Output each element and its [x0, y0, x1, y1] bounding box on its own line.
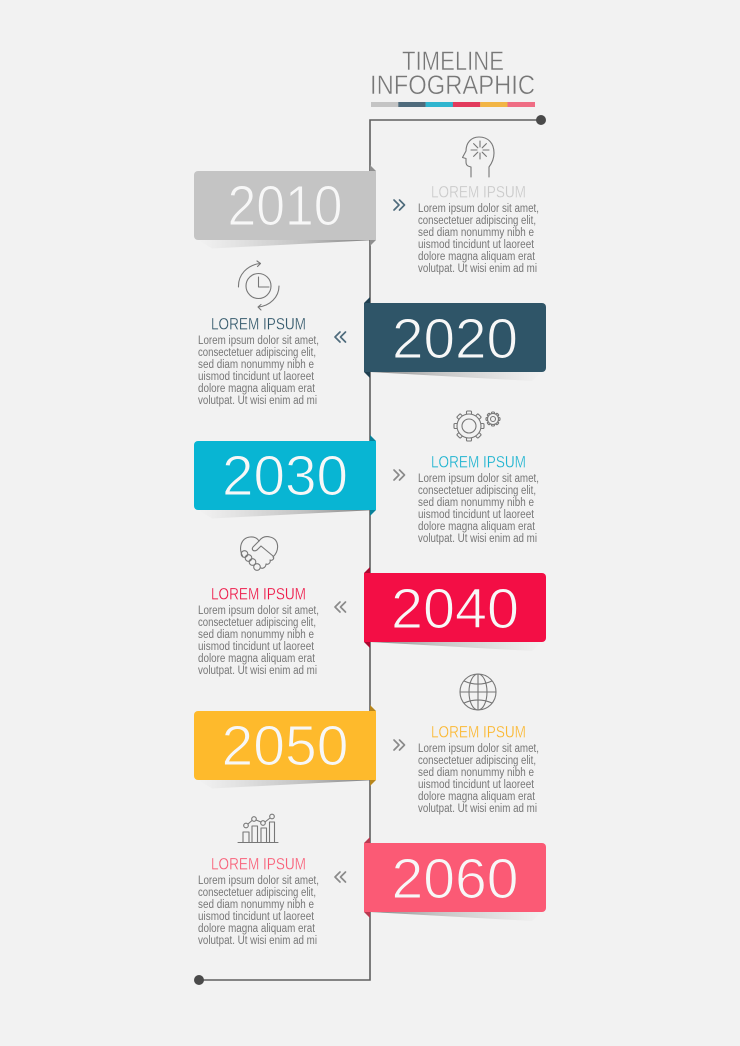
text block: dolore magna aliquam erat — [198, 923, 316, 935]
icon: head — [462, 137, 494, 177]
title: TIMELINE — [402, 46, 504, 76]
text block: sed diam nonummy nibh e — [418, 227, 534, 239]
text block: uismod tincidunt ut laoreet — [198, 911, 315, 923]
text block: dolore magna aliquam erat — [418, 521, 536, 533]
arrow — [335, 332, 346, 342]
panel: 2020 — [198, 261, 546, 407]
text block: Lorem ipsum dolor sit amet, — [198, 875, 319, 887]
icon: gears — [454, 411, 500, 441]
icon: clock — [238, 261, 279, 310]
title: INFOGRAPHIC — [370, 70, 535, 100]
text block: volutpat. Ut wisi enim ad mi — [418, 803, 537, 815]
card: 2060 — [364, 837, 546, 921]
text block: LOREM IPSUM — [431, 184, 526, 202]
title — [370, 46, 535, 100]
text block: Lorem ipsum dolor sit amet, — [198, 335, 319, 347]
text block: sed diam nonummy nibh e — [198, 359, 314, 371]
card: 2010: 2010 — [228, 174, 342, 238]
panel: 2040 — [198, 537, 546, 677]
card: 2030: 2030 — [222, 444, 348, 508]
panel: 2060 — [198, 814, 546, 947]
text block: sed diam nonummy nibh e — [418, 497, 534, 509]
text block: LOREM IPSUM — [211, 316, 306, 334]
timeline line — [194, 115, 546, 985]
text block: Lorem ipsum dolor sit amet, — [198, 605, 319, 617]
text block: uismod tincidunt ut laoreet — [198, 371, 315, 383]
text block: sed diam nonummy nibh e — [198, 899, 314, 911]
text block: dolore magna aliquam erat — [418, 251, 536, 263]
icon: globe — [460, 674, 496, 710]
text block: volutpat. Ut wisi enim ad mi — [198, 665, 317, 677]
card: 2030 — [194, 435, 376, 518]
text block: sed diam nonummy nibh e — [198, 629, 314, 641]
text block — [198, 856, 319, 947]
card: 2020 — [364, 297, 546, 381]
text block: LOREM IPSUM — [211, 586, 306, 604]
text block: volutpat. Ut wisi enim ad mi — [418, 533, 537, 545]
text block: Lorem ipsum dolor sit amet, — [418, 743, 539, 755]
card: 2010 — [194, 165, 376, 248]
text block — [198, 316, 319, 407]
card: 2020: 2020 — [392, 307, 518, 371]
card: 2050: 2050 — [222, 714, 348, 778]
text block: volutpat. Ut wisi enim ad mi — [198, 935, 317, 947]
text block: consectetuer adipiscing elit, — [418, 485, 536, 497]
arrow — [335, 872, 346, 882]
panel: 2050 — [194, 674, 539, 815]
text block: LOREM IPSUM — [211, 856, 306, 874]
arrow — [394, 740, 404, 750]
card: 2040: 2040 — [391, 577, 519, 641]
text block: consectetuer adipiscing elit, — [418, 755, 536, 767]
text block: volutpat. Ut wisi enim ad mi — [198, 395, 317, 407]
text block: uismod tincidunt ut laoreet — [198, 641, 315, 653]
text block — [418, 724, 539, 815]
arrow — [394, 200, 404, 210]
title colour bar — [371, 102, 535, 107]
card: 2050 — [194, 705, 376, 788]
panel: 2010 — [194, 137, 539, 275]
arrow — [394, 470, 404, 480]
text block: consectetuer adipiscing elit, — [198, 347, 316, 359]
text block: dolore magna aliquam erat — [198, 653, 316, 665]
text block: LOREM IPSUM — [431, 454, 526, 472]
text block: consectetuer adipiscing elit, — [198, 617, 316, 629]
arrow — [335, 602, 346, 612]
icon: handshake — [241, 537, 278, 570]
text block: dolore magna aliquam erat — [418, 791, 536, 803]
icon: bar chart — [238, 814, 278, 842]
text block: dolore magna aliquam erat — [198, 383, 316, 395]
card: 2040 — [364, 567, 546, 651]
text block — [418, 184, 539, 275]
text block: uismod tincidunt ut laoreet — [418, 239, 535, 251]
text block: sed diam nonummy nibh e — [418, 767, 534, 779]
text block: consectetuer adipiscing elit, — [418, 215, 536, 227]
card: 2060: 2060 — [392, 847, 518, 911]
text block: uismod tincidunt ut laoreet — [418, 779, 535, 791]
text block: volutpat. Ut wisi enim ad mi — [418, 263, 537, 275]
text block — [198, 586, 319, 677]
text block: Lorem ipsum dolor sit amet, — [418, 473, 539, 485]
text block: LOREM IPSUM — [431, 724, 526, 742]
text block: consectetuer adipiscing elit, — [198, 887, 316, 899]
panel: 2030 — [194, 411, 539, 545]
text block — [418, 454, 539, 545]
text block: uismod tincidunt ut laoreet — [418, 509, 535, 521]
text block: Lorem ipsum dolor sit amet, — [418, 203, 539, 215]
